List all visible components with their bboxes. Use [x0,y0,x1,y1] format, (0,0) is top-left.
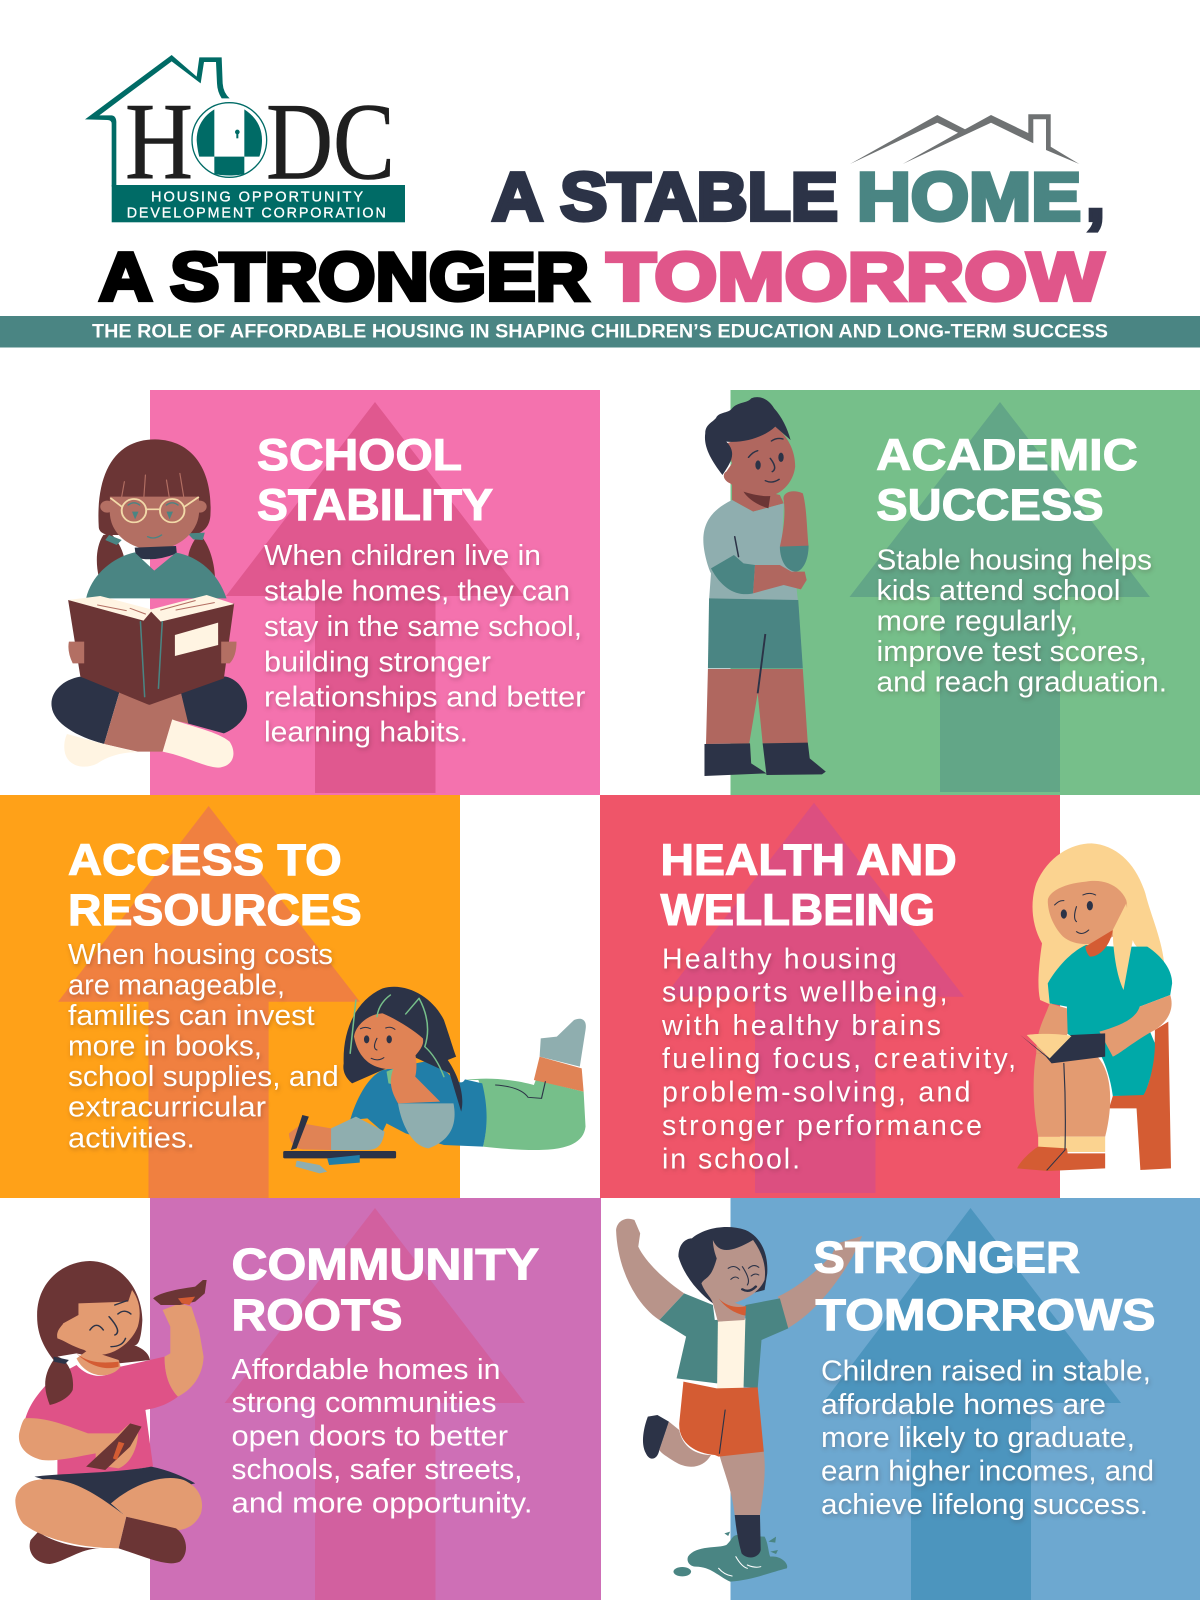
text: school stability: learning habits. [264,717,468,749]
heading: access to resources [68,836,362,935]
panel: health and wellbeing [600,795,1172,1198]
heading: school stability [257,431,493,530]
text: stronger tomorrows: affordable homes are [821,1389,1106,1421]
text: access to resources: more in books, [68,1031,262,1063]
text: stronger tomorrows: more likely to graduate, [821,1422,1135,1454]
heading: school stability: STABILITY [257,481,493,530]
text: school stability: When children live in [264,540,541,572]
text: community roots [232,1354,532,1519]
text: academic success: Stable housing helps [876,544,1152,576]
illustration: thinking boy [703,397,826,776]
panel: community roots [15,1198,601,1600]
logo letter H: H [125,80,193,202]
text: health and wellbeing: stronger performance [662,1110,982,1142]
heading: access to resources: RESOURCES [68,886,362,935]
logo name band: HOUSING OPPORTUNITY [151,189,365,206]
text: academic success: more regularly, [876,606,1078,638]
illustration: boy jumping in puddle [616,1219,862,1582]
panel: stronger tomorrows [616,1198,1200,1600]
text: community roots: open doors to better [232,1421,508,1453]
icon: keyhole circle [192,103,267,177]
heading: academic success: ACADEMIC [876,431,1138,480]
heading: stronger tomorrows: STRONGER [814,1234,1080,1283]
text: access to resources: school supplies, and [68,1061,339,1093]
title [99,159,1105,315]
text: school stability: stay in the same school, [264,611,582,643]
panel: access to resources [0,795,586,1198]
title: TOMORROW [606,239,1104,315]
heading: academic success [876,431,1138,530]
heading: community roots: ROOTS [232,1291,402,1340]
text: access to resources: are manageable, [68,969,285,1001]
title: , [1086,159,1105,235]
text: academic success: kids attend school [876,575,1120,607]
text: access to resources: families can invest [68,1000,315,1032]
logo name band: DEVELOPMENT CORPORATION [127,205,388,222]
arrow: stronger tomorrows [823,1208,1121,1600]
heading: health and wellbeing: WELLBEING [660,886,935,935]
heading: health and wellbeing: HEALTH AND [660,836,957,885]
text: access to resources: extracurricular [68,1092,266,1124]
text: health and wellbeing: fueling focus, creativity, [662,1043,1016,1075]
text: health and wellbeing: Healthy housing [662,943,897,975]
subtitle band [0,316,1200,348]
text: community roots: and more opportunity. [232,1487,532,1519]
arrow: academic success [850,402,1150,792]
text: stronger tomorrows: Children raised in stable, [821,1356,1151,1388]
arrow: community roots [225,1208,525,1600]
panel: academic success [703,390,1200,795]
text: community roots: Affordable homes in [232,1354,500,1386]
logo: HODC house [85,55,405,222]
heading: stronger tomorrows: TOMORROWS [816,1291,1156,1340]
heading: community roots [232,1240,539,1340]
icon: house outline [85,55,230,187]
text: community roots: schools, safer streets, [232,1454,522,1486]
text: stronger tomorrows: achieve lifelong success. [821,1489,1148,1521]
title: HOME [857,159,1081,235]
text: academic success: improve test scores, [876,636,1147,668]
text: academic success: and reach graduation. [876,667,1167,699]
icon: roof over title [850,114,1079,164]
illustration: girl sitting on chair with book [1017,843,1172,1171]
heading: stronger tomorrows [814,1234,1156,1340]
arrow: health and wellbeing [664,803,964,1193]
text: school stability: relationships and better [264,682,586,714]
logo name band [112,185,405,222]
text: health and wellbeing: with healthy brains [661,1010,941,1042]
text: access to resources: activities. [68,1122,195,1154]
text: health and wellbeing [661,943,1016,1175]
illustration: girl reading book [51,439,247,768]
heading: community roots: COMMUNITY [232,1240,539,1289]
arrow: school stability [226,402,524,793]
arrow: access to resources [58,806,360,1198]
text: access to resources [68,939,339,1154]
text: health and wellbeing: supports wellbeing, [662,977,948,1009]
text: health and wellbeing: problem-solving, and [662,1077,970,1109]
panel: school stability [51,390,600,795]
subtitle band: THE ROLE OF AFFORDABLE HOUSING IN SHAPING CHILDREN’S EDUCATION AND LONG-TERM SUCCESS [92,322,1108,342]
heading: academic success: SUCCESS [876,481,1104,530]
text: health and wellbeing: in school. [662,1143,800,1175]
heading: access to resources: ACCESS TO [68,836,342,885]
text: access to resources: When housing costs [68,939,333,971]
title: A STABLE [492,159,838,235]
text: community roots: strong communities [232,1387,496,1419]
heading: health and wellbeing [660,836,957,935]
illustration: girl lying down drawing [283,987,586,1173]
text: school stability: stable homes, they can [264,576,570,608]
text: stronger tomorrows [821,1356,1154,1521]
text: academic success [876,544,1167,699]
title: A STRONGER [99,239,589,315]
text: school stability: building stronger [264,647,491,679]
illustration: girl playing with toy planes [15,1261,207,1564]
logo letters DC: DC [266,80,395,202]
text: school stability [264,540,586,749]
text: stronger tomorrows: earn higher incomes, and [821,1456,1154,1488]
heading: school stability: SCHOOL [257,431,462,480]
